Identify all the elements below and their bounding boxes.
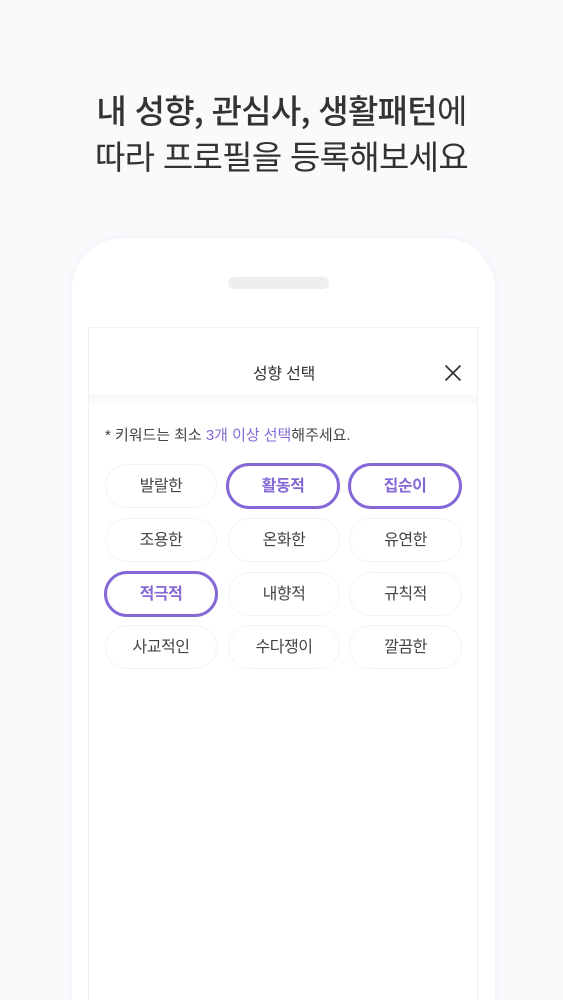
keyword chips — [104, 463, 462, 669]
chip: 발랄한 — [105, 464, 217, 508]
chip: 내향적: 내향적 — [263, 586, 305, 603]
chip: 사교적인: 사교적인 — [133, 639, 189, 656]
chip: 유연한 — [349, 518, 462, 562]
title: 따라 프로필을 등록해보세요 — [95, 131, 468, 179]
phone speaker — [228, 277, 329, 289]
phone mockup — [72, 238, 495, 1000]
chip: 적극적 selected — [104, 571, 218, 617]
chip: 깔끔한 — [349, 625, 462, 669]
title — [95, 85, 468, 179]
chip: 규칙적: 규칙적 — [384, 586, 427, 603]
chip: 적극적 selected: 적극적 — [140, 586, 182, 603]
chip: 집순이 selected — [348, 463, 462, 509]
chip: 깔끔한: 깔끔한 — [384, 639, 427, 656]
screen — [88, 327, 478, 1000]
chip: 활동적 selected: 활동적 — [262, 478, 304, 495]
chip: 사교적인 — [105, 625, 217, 669]
title: 내 성향, 관심사, 생활패턴에 — [96, 85, 467, 133]
chip: 수다쟁이 — [228, 625, 340, 669]
chip: 조용한: 조용한 — [140, 532, 182, 549]
icon: close — [445, 364, 461, 382]
chip: 규칙적 — [349, 572, 462, 616]
chip: 수다쟁이: 수다쟁이 — [256, 639, 312, 656]
chip: 내향적 — [228, 572, 340, 616]
screen title: 성향 선택 — [253, 366, 315, 383]
chip: 발랄한: 발랄한 — [140, 478, 182, 495]
chip: 활동적 selected — [226, 463, 340, 509]
header divider band — [89, 394, 477, 404]
instruction text: * 키워드는 최소 3개 이상 선택해주세요. — [105, 427, 351, 444]
chip: 집순이 selected: 집순이 — [384, 478, 426, 495]
chip: 온화한: 온화한 — [263, 532, 305, 549]
chip: 조용한 — [105, 518, 217, 562]
chip: 유연한: 유연한 — [384, 532, 427, 549]
chip: 온화한 — [228, 518, 340, 562]
